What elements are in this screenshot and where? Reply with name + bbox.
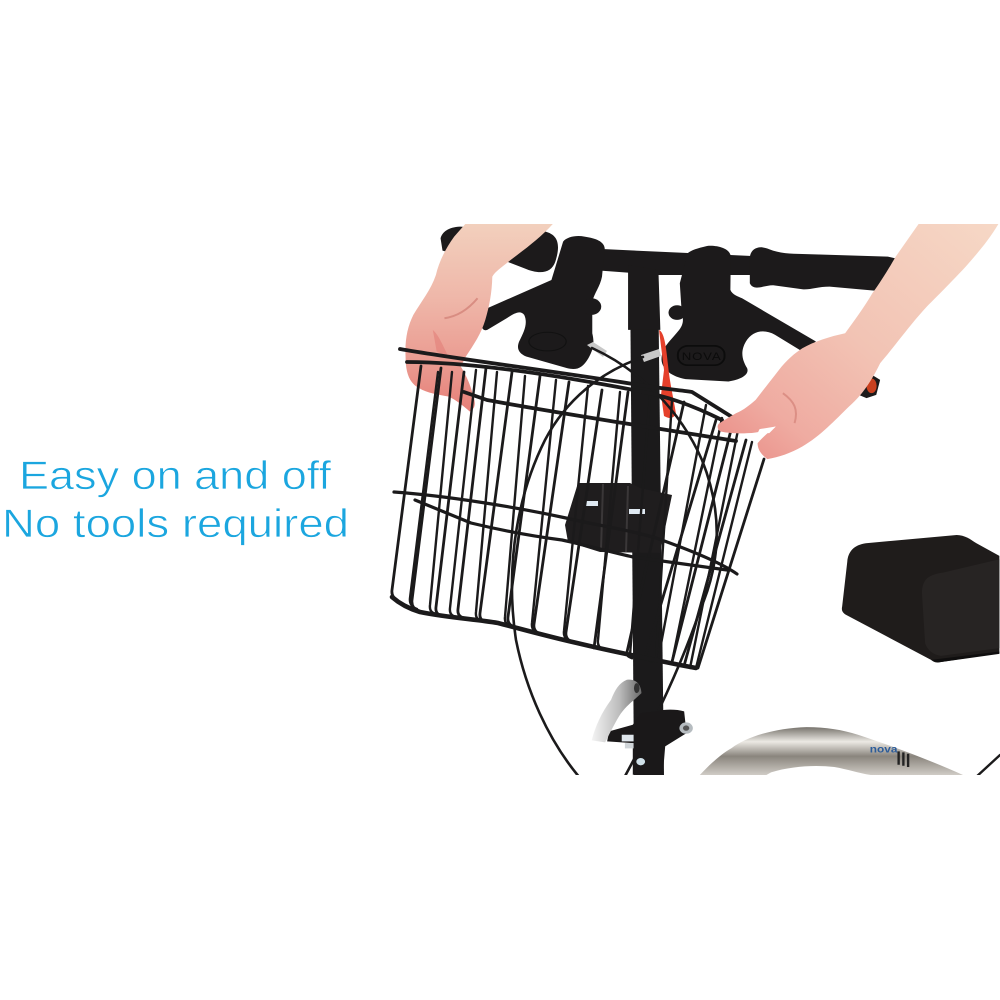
knee pad [842, 535, 999, 662]
red brake clip [659, 330, 676, 418]
brake cable fittings [587, 342, 661, 362]
stem clamp with quick-release lever [592, 680, 693, 775]
photo: knee walker with wire basket [392, 223, 1000, 778]
frame tube with nova label [699, 727, 965, 776]
frame cable at right edge [976, 754, 1000, 775]
handlebar with grips and brake brackets: NOVA [682, 350, 722, 363]
basket back wires [410, 370, 752, 668]
heading: easy on and off, no tools required: Easy on and off [19, 454, 332, 498]
wire basket [392, 349, 764, 668]
handlebar with grips and brake brackets [441, 227, 895, 398]
heading: easy on and off, no tools required [2, 454, 349, 546]
left hand holding basket [405, 223, 553, 411]
basket bottom rim [392, 597, 696, 668]
right hand holding basket [718, 223, 999, 459]
frame tube with nova label: nova [870, 744, 898, 755]
basket front wires [392, 366, 764, 668]
basket mount plate [565, 483, 672, 553]
basket middle ring [394, 492, 737, 574]
brake cables [512, 348, 717, 778]
stem post [630, 330, 664, 775]
basket top rim [400, 349, 736, 441]
heading: easy on and off, no tools required: No tools required [2, 502, 349, 546]
